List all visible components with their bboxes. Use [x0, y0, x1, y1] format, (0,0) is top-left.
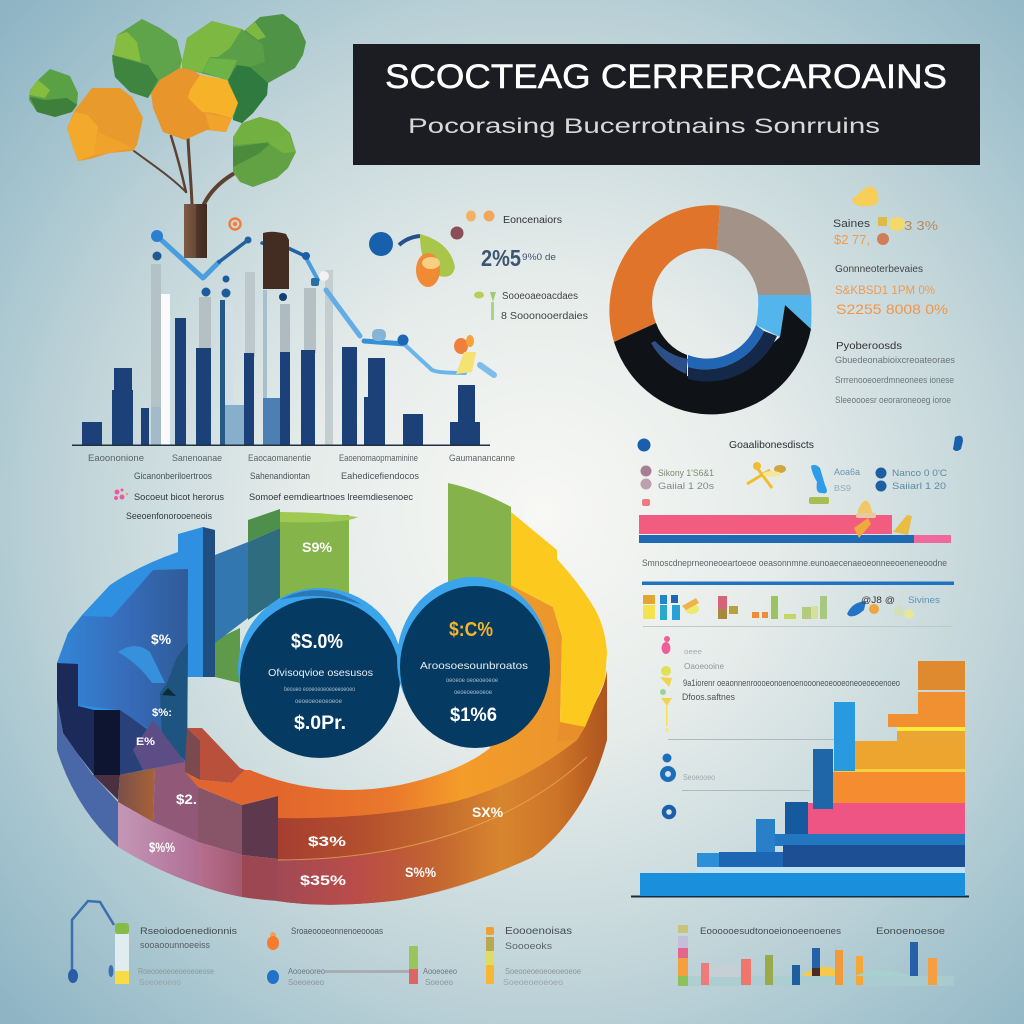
legend: pink — [640, 466, 714, 506]
bottom legend 3 — [486, 926, 581, 987]
donut: blue arcs — [651, 325, 777, 382]
icon: blue dot and leaf — [369, 232, 455, 287]
bottom legend 2: Soeoeo — [425, 977, 453, 987]
right circle: Aroosoesounbroatos — [420, 660, 528, 672]
bottom chart — [678, 925, 954, 986]
ring labels: $35% — [300, 872, 347, 888]
bottom legend 3: Soooeoks — [505, 941, 552, 952]
annotation text: Oaoeooine — [684, 661, 724, 671]
ring labels: $%% — [149, 839, 175, 855]
stair step chart — [631, 661, 969, 898]
subtitle: Pocorasing Bucerrotnains Sonrruins — [408, 115, 880, 138]
bar chart labels: Sahenandiontan — [250, 471, 310, 482]
baseline plate — [688, 976, 954, 986]
mini bar chart: @J8 @ — [861, 595, 895, 605]
left orange leaf — [67, 88, 143, 161]
annotation text: oeee — [684, 649, 702, 656]
legend: blue: Nanco 0 0'C — [892, 468, 947, 479]
donut legend: Gbuedeonabioixcreoateoraes — [835, 355, 955, 366]
donut legend: $2 77, — [834, 232, 870, 247]
bottom legend 1: Roeooeoeoeoeoeoeose — [138, 966, 214, 976]
stacked column — [678, 925, 688, 986]
icon: orange drop — [267, 932, 279, 950]
donut chart — [609, 205, 812, 414]
bar chart labels: Eahedicefiendocos — [341, 471, 419, 482]
top centre legend: Sooeoaeoacdaes — [502, 291, 578, 302]
title banner — [353, 44, 980, 165]
right circle: $1%6 — [450, 705, 497, 726]
trend line — [157, 236, 494, 375]
donut: taupe segment — [717, 206, 811, 295]
left circle: oeoeoeoeoeoeoe — [295, 699, 343, 705]
annotation text: Dfoos.saftnes — [682, 692, 735, 703]
legend: pink: Sikony 1'S6&1 — [658, 468, 714, 479]
ring yellow segment — [511, 512, 607, 727]
red face blocks — [185, 728, 278, 805]
stair chart annotations — [660, 636, 900, 817]
icon: blue dots — [638, 436, 963, 452]
donut legend: S&KBSD1 1PM 0% — [835, 283, 935, 297]
gauge bar — [108, 923, 129, 984]
top centre legend: 9%0 de — [522, 252, 556, 262]
donut legend: Srrrenooeoerdmneonees ionese — [835, 375, 954, 386]
right comparison panel: Goaalibonesdiscts — [729, 439, 814, 451]
bright patch — [118, 646, 165, 683]
far left leaf — [29, 69, 78, 117]
axis — [72, 444, 490, 446]
dark teal column — [160, 643, 188, 763]
bar chart — [72, 264, 490, 446]
annotation text: Seoeooeo — [683, 773, 715, 782]
legend: pink: Gaiial 1 20s — [658, 481, 714, 492]
dark navy blocks — [57, 663, 185, 775]
ring labels: $% — [151, 631, 172, 647]
top centre legend: Eoncenaiors — [503, 215, 562, 226]
ring labels: $2. — [176, 791, 197, 807]
donut: orange segment — [609, 205, 720, 342]
donut legend: 3 3% — [904, 218, 938, 233]
ring orange face — [242, 585, 585, 818]
bar chart labels: Eaocaomanentie — [248, 453, 311, 464]
icon: yellow blob — [877, 217, 905, 245]
annotation text — [668, 649, 900, 791]
legend: blue — [876, 468, 947, 492]
circular 3D chart — [57, 483, 607, 905]
bar chart labels: Gaumanancanne — [449, 453, 515, 464]
donut legend: Pyoberoosds — [836, 340, 902, 352]
annotation text: 9a1iorenr oeaonnenroooeonoenoenoooneoeooeoneoeoeoenoeo — [683, 678, 900, 689]
bar chart labels — [88, 453, 515, 522]
icon: yellow splash — [852, 186, 878, 206]
bottom chart: Eoooooesudtonoeionoeenoenes — [700, 926, 841, 937]
donut legend: S2255 8008 0% — [836, 301, 948, 317]
brown block — [263, 232, 289, 289]
icon: yellow crossing — [747, 462, 786, 488]
bar chart labels: Socoeut bicot herorus — [134, 492, 224, 503]
highlight line — [278, 757, 587, 860]
left circle: $S.0% — [291, 631, 343, 653]
right comparison panel: BS9 — [834, 484, 852, 493]
donut legend — [833, 186, 955, 406]
donut legend: Sleeoooesr oeoraroneoeg ioroe — [835, 395, 951, 406]
bottom legend 3: Eoooenoisas — [505, 926, 572, 937]
bar chart labels: Eaoenomaoprnaminine — [339, 453, 418, 464]
left circle: $.0Pr. — [294, 713, 346, 734]
donut: light blue segment — [756, 295, 812, 337]
teal band — [248, 528, 280, 620]
top green leaf — [112, 19, 182, 98]
bottom legend 1: sooaoounnoeeiss — [140, 940, 210, 951]
legend: blue: Saiiarl 1 20 — [892, 481, 946, 492]
right orange accent — [557, 722, 585, 741]
right circle: oeoeoe oeoeoeoeoe — [446, 678, 499, 684]
mid blue band — [215, 542, 248, 643]
blue ring section — [57, 527, 280, 775]
bottom legend 3: Soeoeoeoeoeo — [503, 977, 563, 987]
green panel 1 — [215, 509, 358, 683]
dark strip — [203, 527, 215, 677]
icon: orange dots — [450, 210, 494, 240]
bottom legend 2: Sroaeoooeonnenoeoooas — [291, 926, 383, 937]
left circle — [238, 588, 402, 758]
right comparison panel: Aoa6a — [834, 467, 860, 477]
navy bars — [82, 300, 480, 445]
tree illustration — [29, 14, 306, 258]
right circle: oeoeoeoeoeoe — [454, 690, 493, 696]
icon: blue dot — [267, 970, 279, 984]
title: SCOCTEAG CERRERCAROAINS — [385, 58, 947, 96]
bar chart labels: Seeoenfonorooeneois — [126, 511, 212, 522]
trend line markers — [151, 218, 408, 346]
stacked bars — [639, 500, 951, 543]
legend figure: 2%5 — [481, 245, 521, 271]
mini bars — [701, 942, 937, 985]
bottom legend 1 — [68, 901, 237, 987]
bottom legend 3: Soeooeoeoeoeoeoeoe — [505, 966, 581, 976]
mini bar chart — [643, 595, 953, 627]
icon: pink flower — [114, 488, 128, 500]
bar chart labels: Sanenoanae — [172, 453, 222, 464]
top centre legend: 8 Sooonooerdaies — [501, 311, 588, 322]
right circle — [397, 577, 550, 748]
mini bar chart: Sivines — [908, 595, 940, 606]
inner blue panel — [57, 569, 188, 763]
green panel 2 — [448, 483, 511, 600]
icon: pink figure — [662, 636, 670, 654]
top right green leaves — [182, 14, 306, 123]
bottom legend 2 — [267, 926, 457, 987]
icon: blue splash — [809, 465, 829, 504]
bottom legend 1: Soeoeoeoo — [139, 977, 181, 987]
ring labels: $3% — [308, 833, 347, 849]
right comparison panel — [638, 436, 963, 627]
donut legend: Gonnneoterbevaies — [835, 263, 923, 275]
lower right green leaf — [233, 117, 296, 187]
ring labels: S9% — [302, 539, 333, 555]
right comparison panel: Smnoscdneprneoneoeartoeoe oeasonnmne.eunoaecenaeoeonneeoeneneoodne — [642, 558, 947, 569]
ring labels: S%% — [405, 864, 436, 880]
bottom legend 1: Rseoiodoenedionnis — [140, 926, 237, 937]
lower band — [277, 800, 530, 905]
right circle: $:C% — [449, 619, 493, 641]
donut legend: Saines — [833, 218, 871, 230]
tree trunk — [184, 204, 207, 258]
ring labels — [136, 539, 504, 888]
stacked column — [486, 927, 494, 984]
ring labels: $%: — [152, 707, 172, 719]
ring side wall — [277, 670, 607, 905]
donut: black segment — [614, 305, 811, 414]
bar chart labels: Gicanonberiloertroos — [134, 471, 212, 482]
mini column — [409, 946, 418, 984]
ring labels: E% — [136, 736, 155, 748]
bottom legend 2: Aooeooreo — [288, 966, 325, 976]
bar chart labels: Eaoononione — [88, 453, 144, 464]
bottom legend 2: Aooeoeeo — [423, 966, 457, 976]
top centre legend — [369, 210, 588, 322]
left circle: beoueo eooeoeoeoeoeeoeoeo — [284, 687, 356, 693]
bar chart labels: Somoef eemdieartnoes lreemdiesenoec — [249, 492, 413, 503]
left circle: Ofvisoqvioe osesusos — [268, 668, 373, 679]
bottom legend 2: Soeoeoeo — [288, 977, 324, 987]
bottom chart: Eonoenoesoe — [876, 926, 945, 937]
icon: blue stand — [72, 901, 114, 975]
center orange leaf — [151, 68, 238, 140]
icon: yellow figures — [660, 666, 672, 732]
icon: blue circles — [662, 754, 674, 817]
mauve and pink blocks — [93, 762, 278, 901]
runner figure icon — [454, 335, 476, 374]
pale background bars — [151, 264, 333, 445]
tree branches — [134, 136, 233, 204]
ring labels: SX% — [472, 804, 504, 820]
outer blue — [57, 527, 203, 775]
blue side wall — [57, 700, 118, 847]
icon: small sprouts — [474, 292, 496, 320]
